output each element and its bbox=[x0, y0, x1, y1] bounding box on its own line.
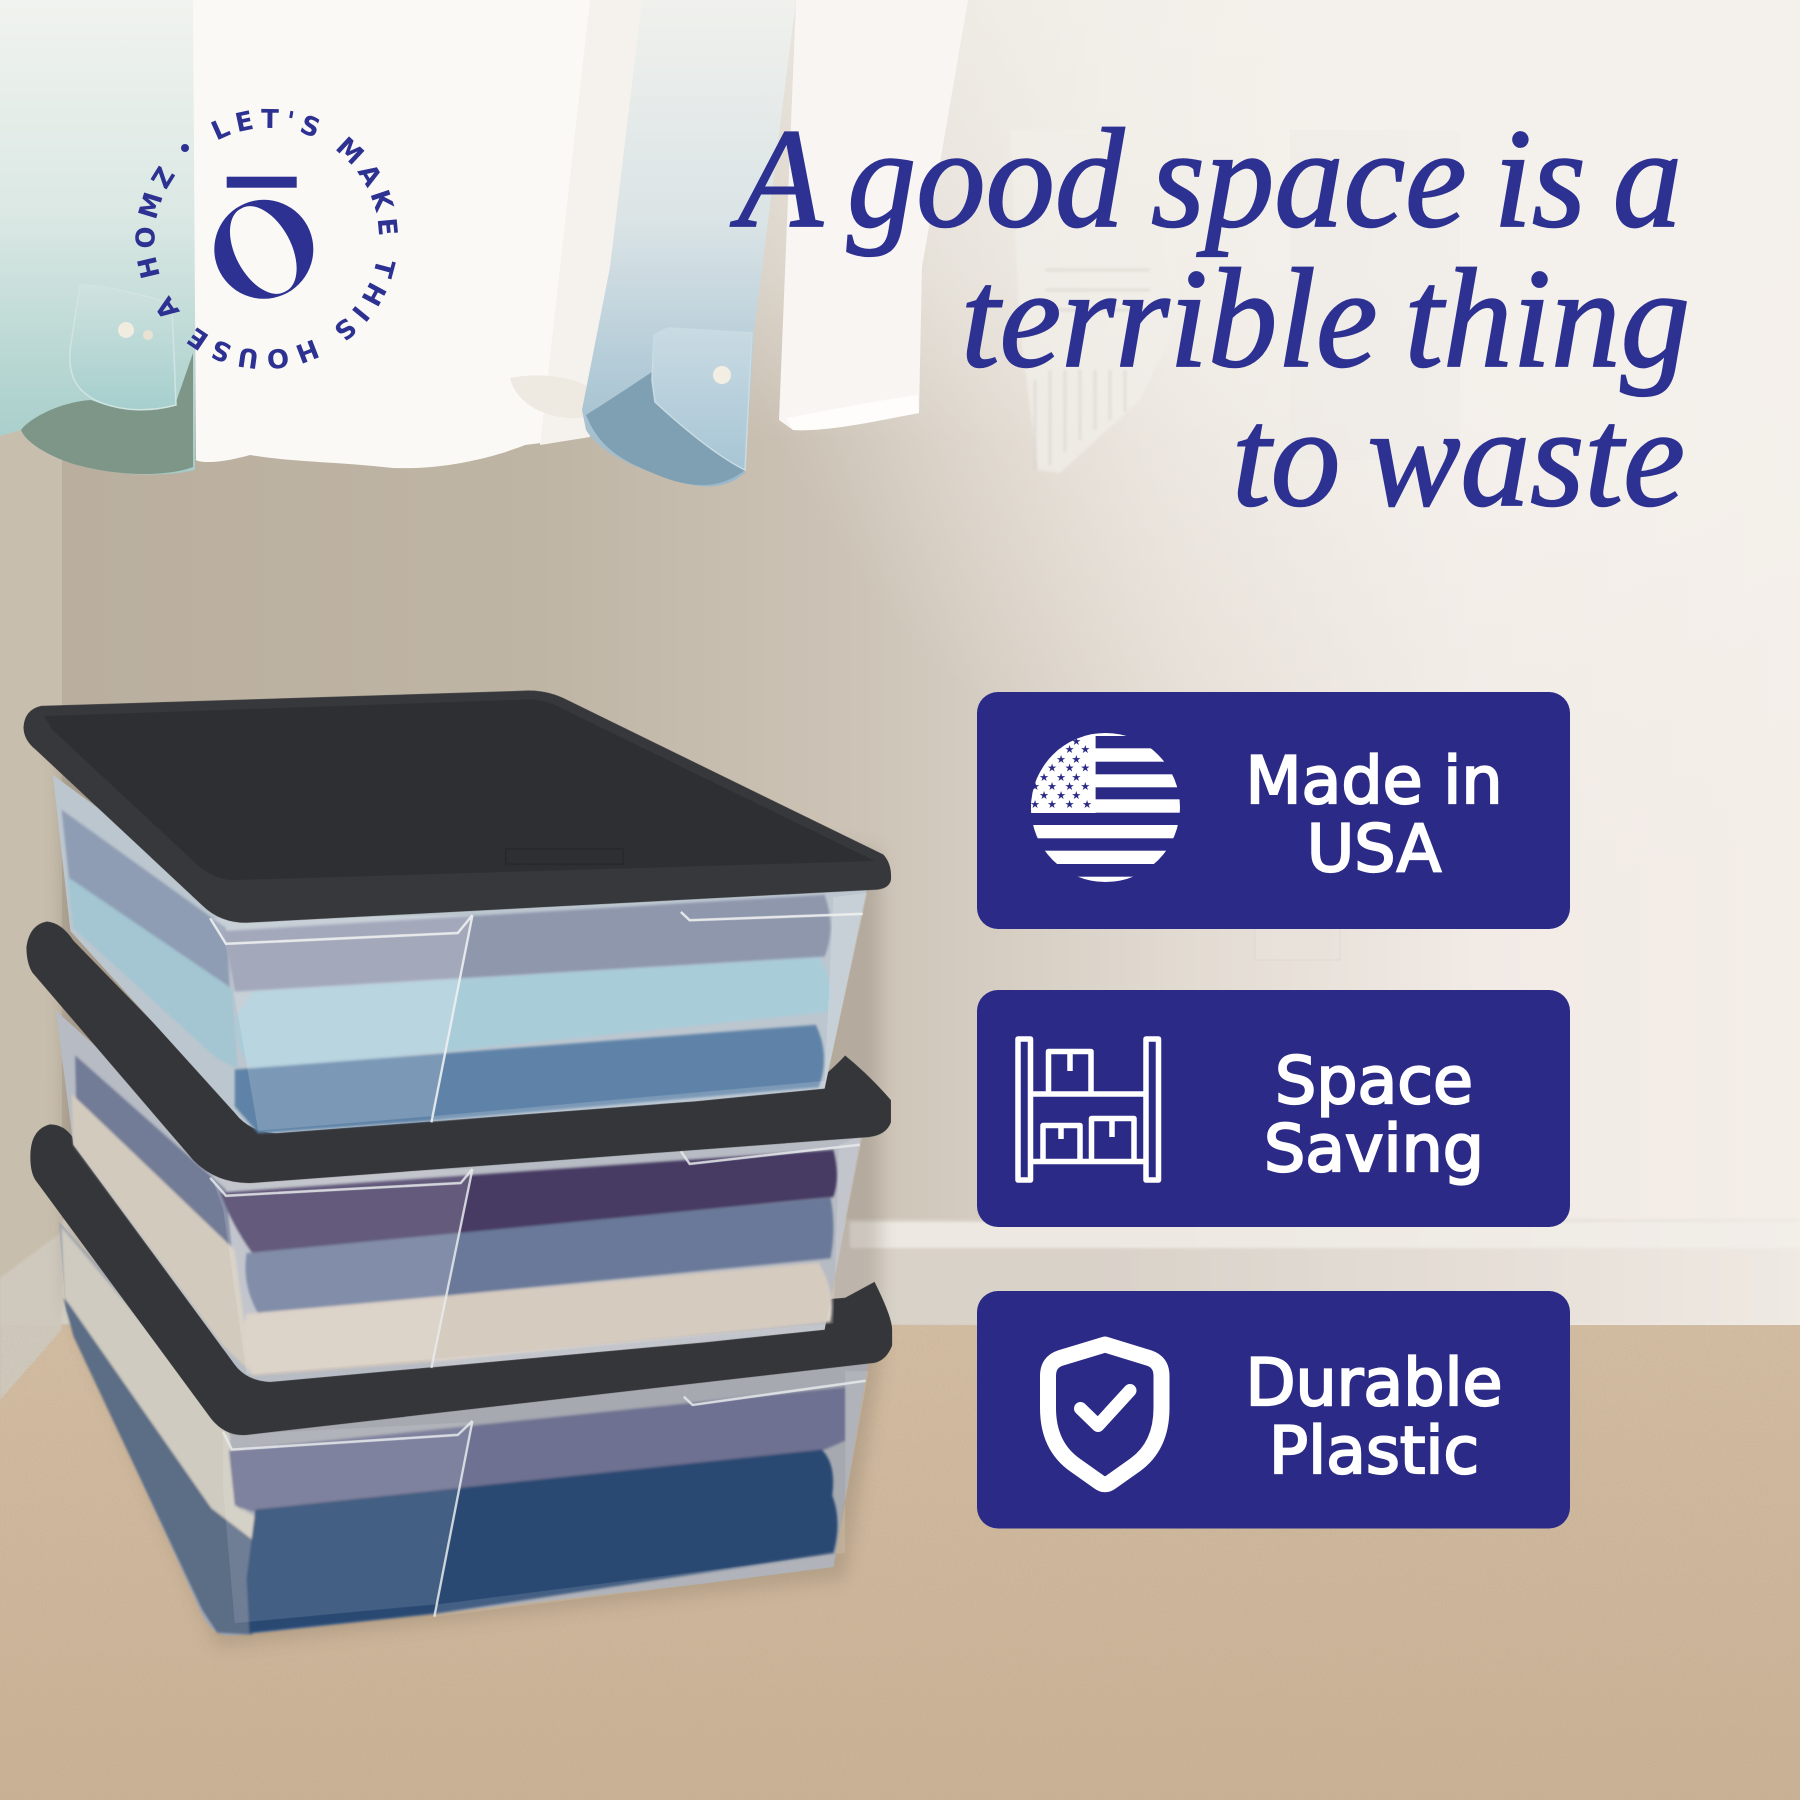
card text: durable plastic: Durable bbox=[1245, 1346, 1503, 1421]
icon: us flag: ★ bbox=[1056, 789, 1066, 802]
bottom box bbox=[59, 1221, 869, 1636]
icon: us flag: ★ bbox=[1056, 753, 1066, 766]
shadow on floor and wall bbox=[59, 724, 880, 1645]
icon: shelf with boxes bbox=[1018, 1039, 1158, 1180]
icon: us flag: ★ bbox=[1065, 798, 1075, 811]
icon: us flag: ★ bbox=[1056, 771, 1066, 784]
icon: us flag: ★ bbox=[1039, 771, 1049, 784]
card text: made in usa: Made in bbox=[1245, 744, 1503, 819]
icon: us flag: ★ bbox=[1065, 762, 1075, 774]
top box bbox=[53, 775, 867, 1133]
icon: us flag: ★ bbox=[1071, 771, 1081, 784]
icon: us flag: ★ bbox=[1047, 780, 1057, 793]
card text: space saving: Saving bbox=[1264, 1112, 1484, 1187]
middle lid bbox=[26, 921, 891, 1183]
middle box bbox=[56, 1011, 863, 1382]
icon: shield with check bbox=[1048, 1344, 1162, 1484]
icon: us flag: ★ bbox=[1039, 789, 1049, 802]
product: stacked storage boxes bbox=[23, 691, 892, 1645]
icon: us flag: ★ bbox=[1082, 798, 1092, 811]
icon: us flag bbox=[1030, 733, 1180, 883]
top lid bbox=[23, 691, 891, 923]
icon: us flag: ★ bbox=[1080, 780, 1090, 793]
background: hanging shirts bbox=[0, 0, 1460, 486]
logo mark bbox=[214, 177, 313, 299]
title: to waste bbox=[1232, 378, 1685, 536]
title bbox=[730, 99, 1690, 536]
bottom lid bbox=[30, 1124, 892, 1435]
title: terrible thing bbox=[961, 239, 1690, 397]
card: made in usa bbox=[977, 692, 1570, 929]
card text: made in usa: USA bbox=[1307, 812, 1441, 887]
title: A good space is a bbox=[730, 99, 1682, 257]
card text: space saving: Space bbox=[1275, 1044, 1473, 1119]
icon: us flag: ★ bbox=[1030, 780, 1040, 793]
icon: us flag: ★ bbox=[1080, 762, 1090, 774]
icon: us flag: ★ bbox=[1047, 762, 1057, 774]
icon: us flag: ★ bbox=[1030, 798, 1040, 811]
icon: us flag: ★ bbox=[1071, 753, 1081, 766]
icon: us flag: ★ bbox=[1065, 780, 1075, 793]
logo: circular brand badge bbox=[135, 108, 398, 369]
card text: durable plastic: Plastic bbox=[1269, 1414, 1479, 1489]
card: space saving bbox=[977, 990, 1570, 1227]
card: durable plastic bbox=[977, 1291, 1570, 1528]
icon: us flag: ★ bbox=[1047, 798, 1057, 811]
icon: us flag: ★ bbox=[1071, 789, 1081, 802]
icon: us flag: ★ bbox=[1065, 743, 1075, 756]
icon: us flag: ★ bbox=[1080, 743, 1090, 756]
icon: us flag: ★ bbox=[1071, 735, 1081, 748]
logo ring text: LET'S MAKE THIS HOUSE A HOMZ bbox=[135, 108, 398, 369]
